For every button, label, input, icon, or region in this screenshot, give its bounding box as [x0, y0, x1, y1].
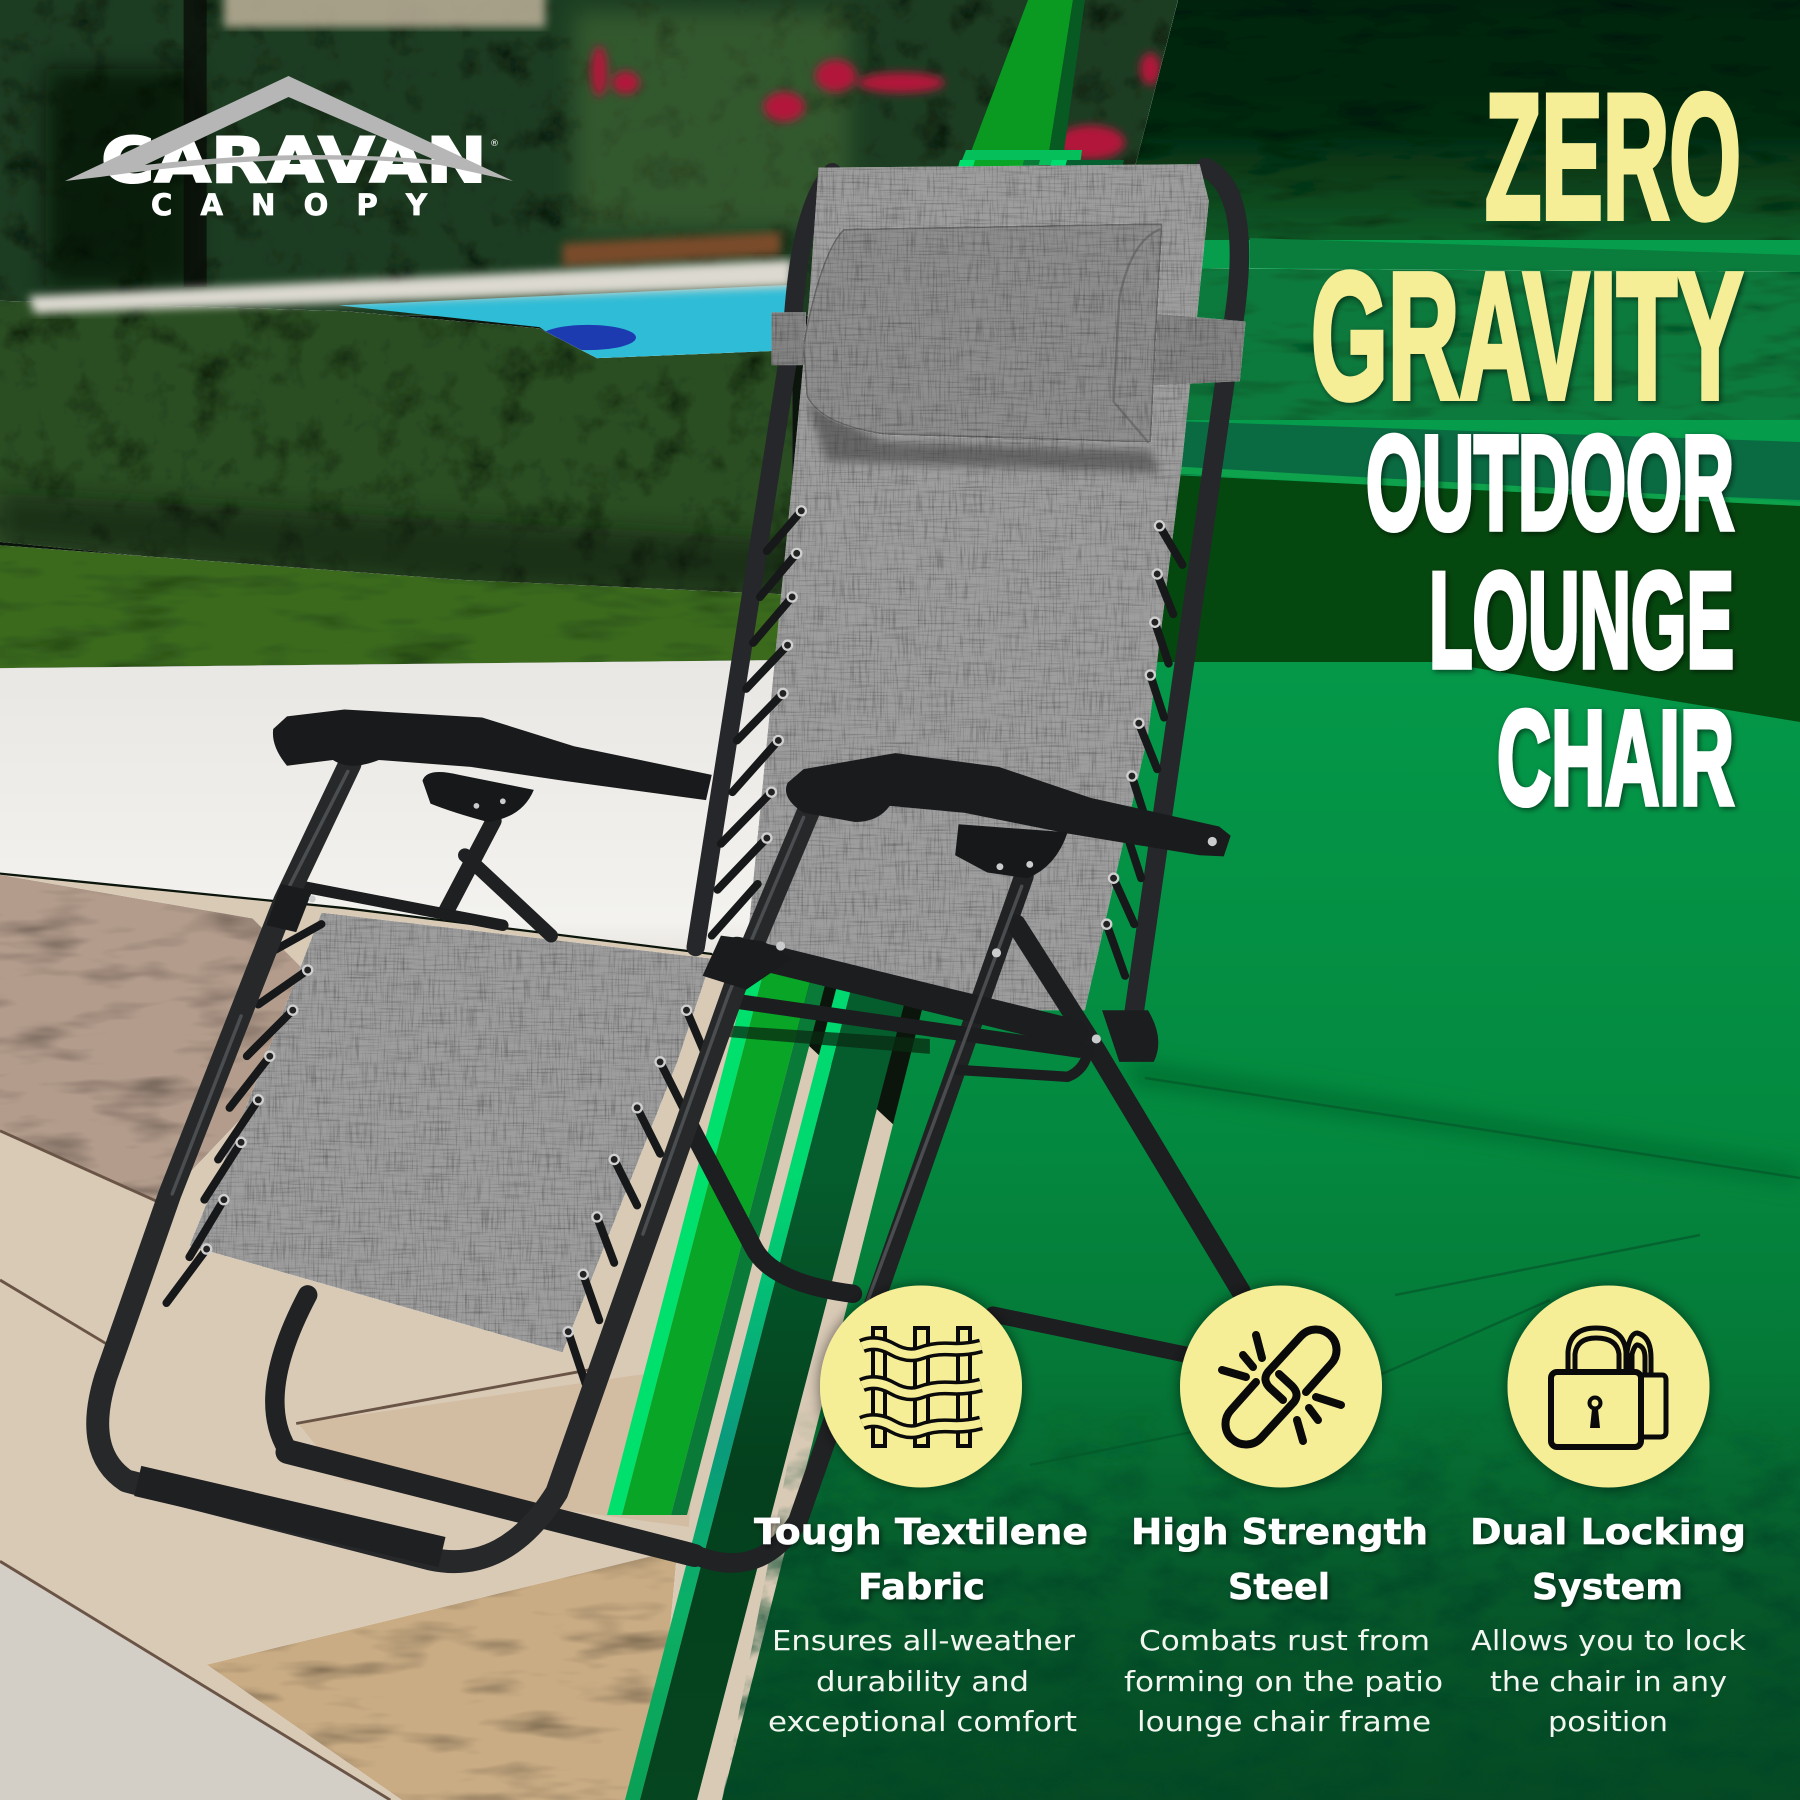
planter edge: [563, 232, 781, 266]
background wall at top: [224, 0, 545, 28]
pool float: [540, 325, 636, 350]
seat eyelets: [202, 965, 691, 1336]
feature: Tough Textilene Fabric: [754, 1286, 1088, 1738]
heading: Dual Locking: [1470, 1512, 1746, 1553]
heading: [1131, 1512, 1428, 1608]
tinted paving joints: [1030, 1078, 1800, 1465]
right pivot: [955, 824, 1068, 878]
medium stripe: [622, 160, 1024, 1515]
heading: [1470, 1512, 1746, 1608]
registered mark: ®: [490, 139, 499, 149]
back bungee laces: [712, 511, 1182, 976]
shaded floor edge: [1130, 1060, 1800, 1185]
heading: Steel: [1228, 1567, 1330, 1608]
curved brace and bottom bar: [690, 1126, 1186, 1355]
heading: System: [1532, 1567, 1683, 1608]
back frame: [696, 168, 1239, 1027]
lawn: [0, 545, 792, 668]
foot bar grip: [138, 1481, 442, 1552]
headrest side seam: [1114, 230, 1159, 442]
wide dark stripe: [640, 160, 1124, 1800]
heading: Fabric: [858, 1567, 985, 1608]
left seat beam: [301, 886, 503, 925]
description: [768, 1624, 1077, 1738]
logo roof: [65, 76, 513, 181]
outer frame: [98, 763, 809, 1562]
green tinted right panel: [722, 0, 1800, 1800]
tinted lawn: [1025, 470, 1800, 722]
heading: High Strength: [1131, 1512, 1428, 1553]
headrest strap: [771, 312, 1246, 386]
left armrest: [273, 709, 712, 800]
light foliage behind chair: [574, 11, 850, 230]
back fabric: [746, 164, 1209, 1010]
description: durability and: [816, 1665, 1029, 1698]
description: lounge chair frame: [1137, 1705, 1431, 1738]
left cross legs: [445, 821, 551, 936]
garden hedge: [0, 0, 1194, 316]
stone paving: [0, 875, 918, 1800]
description: Combats rust from: [1139, 1624, 1430, 1657]
heading: [754, 1512, 1088, 1608]
feature: High Strength Steel: [1124, 1286, 1443, 1738]
back eyelets: [762, 506, 1164, 929]
seat bungee laces: [166, 924, 706, 1383]
description: Allows you to lock: [1471, 1624, 1747, 1657]
rear foot plate: [1102, 1010, 1158, 1062]
feature: Dual Locking System: [1470, 1286, 1747, 1738]
description: forming on the patio: [1124, 1665, 1443, 1698]
logo wordmark CARAVAN: CARAVAN: [101, 124, 487, 197]
pool water: [339, 285, 792, 367]
chair shadow on floor: [723, 1025, 930, 1054]
icon: broken chain link: [1180, 1286, 1382, 1488]
pool coping: [29, 259, 792, 313]
darker stripe: [671, 160, 1040, 1515]
front hedge: [0, 301, 792, 597]
product: zero gravity lounge chair: [98, 164, 1246, 1563]
concrete pool deck: [0, 660, 781, 1033]
paving joints: [0, 1131, 597, 1800]
outer frame highlight: [172, 771, 1022, 1303]
description: [1471, 1624, 1747, 1738]
icon: double padlock: [1508, 1286, 1710, 1488]
mottled tinted paving: [722, 1400, 1800, 1800]
tinted bushes: [1116, 0, 1800, 240]
description: [1124, 1624, 1443, 1738]
upper stripe fragment: [966, 0, 1073, 165]
rear inner U frame: [275, 876, 1024, 1563]
green diagonal stripes: [607, 0, 1124, 1800]
logo wordmark CANOPY: CANOPY: [151, 188, 428, 222]
flowers: [591, 46, 1161, 160]
heading: Tough Textilene: [754, 1512, 1088, 1553]
description: Ensures all-weather: [772, 1624, 1076, 1657]
description: the chair in any: [1490, 1665, 1727, 1698]
right armrest: [786, 753, 1231, 856]
title: [1311, 57, 1743, 833]
second bright stripe: [625, 160, 1067, 1800]
seat fabric: [189, 913, 712, 1352]
headrest shadow: [807, 402, 1159, 473]
tinted pool edge: [1250, 238, 1800, 272]
description: exceptional comfort: [768, 1705, 1077, 1738]
tinted pool water: [1082, 268, 1800, 420]
right seat beams: [735, 951, 1088, 1077]
rear leg: [1016, 924, 1241, 1292]
seat collars: [266, 884, 792, 990]
brand logo: Caravan Canopy: [65, 76, 513, 222]
rivets: [309, 798, 1217, 1044]
left pivot: [422, 772, 534, 822]
icon: woven fabric: [820, 1286, 1022, 1488]
bright stripe: [607, 160, 975, 1515]
hedge base shadow: [0, 494, 792, 597]
description: position: [1548, 1705, 1668, 1738]
tinted coping: [1072, 418, 1800, 500]
headrest pillow: [804, 224, 1162, 442]
